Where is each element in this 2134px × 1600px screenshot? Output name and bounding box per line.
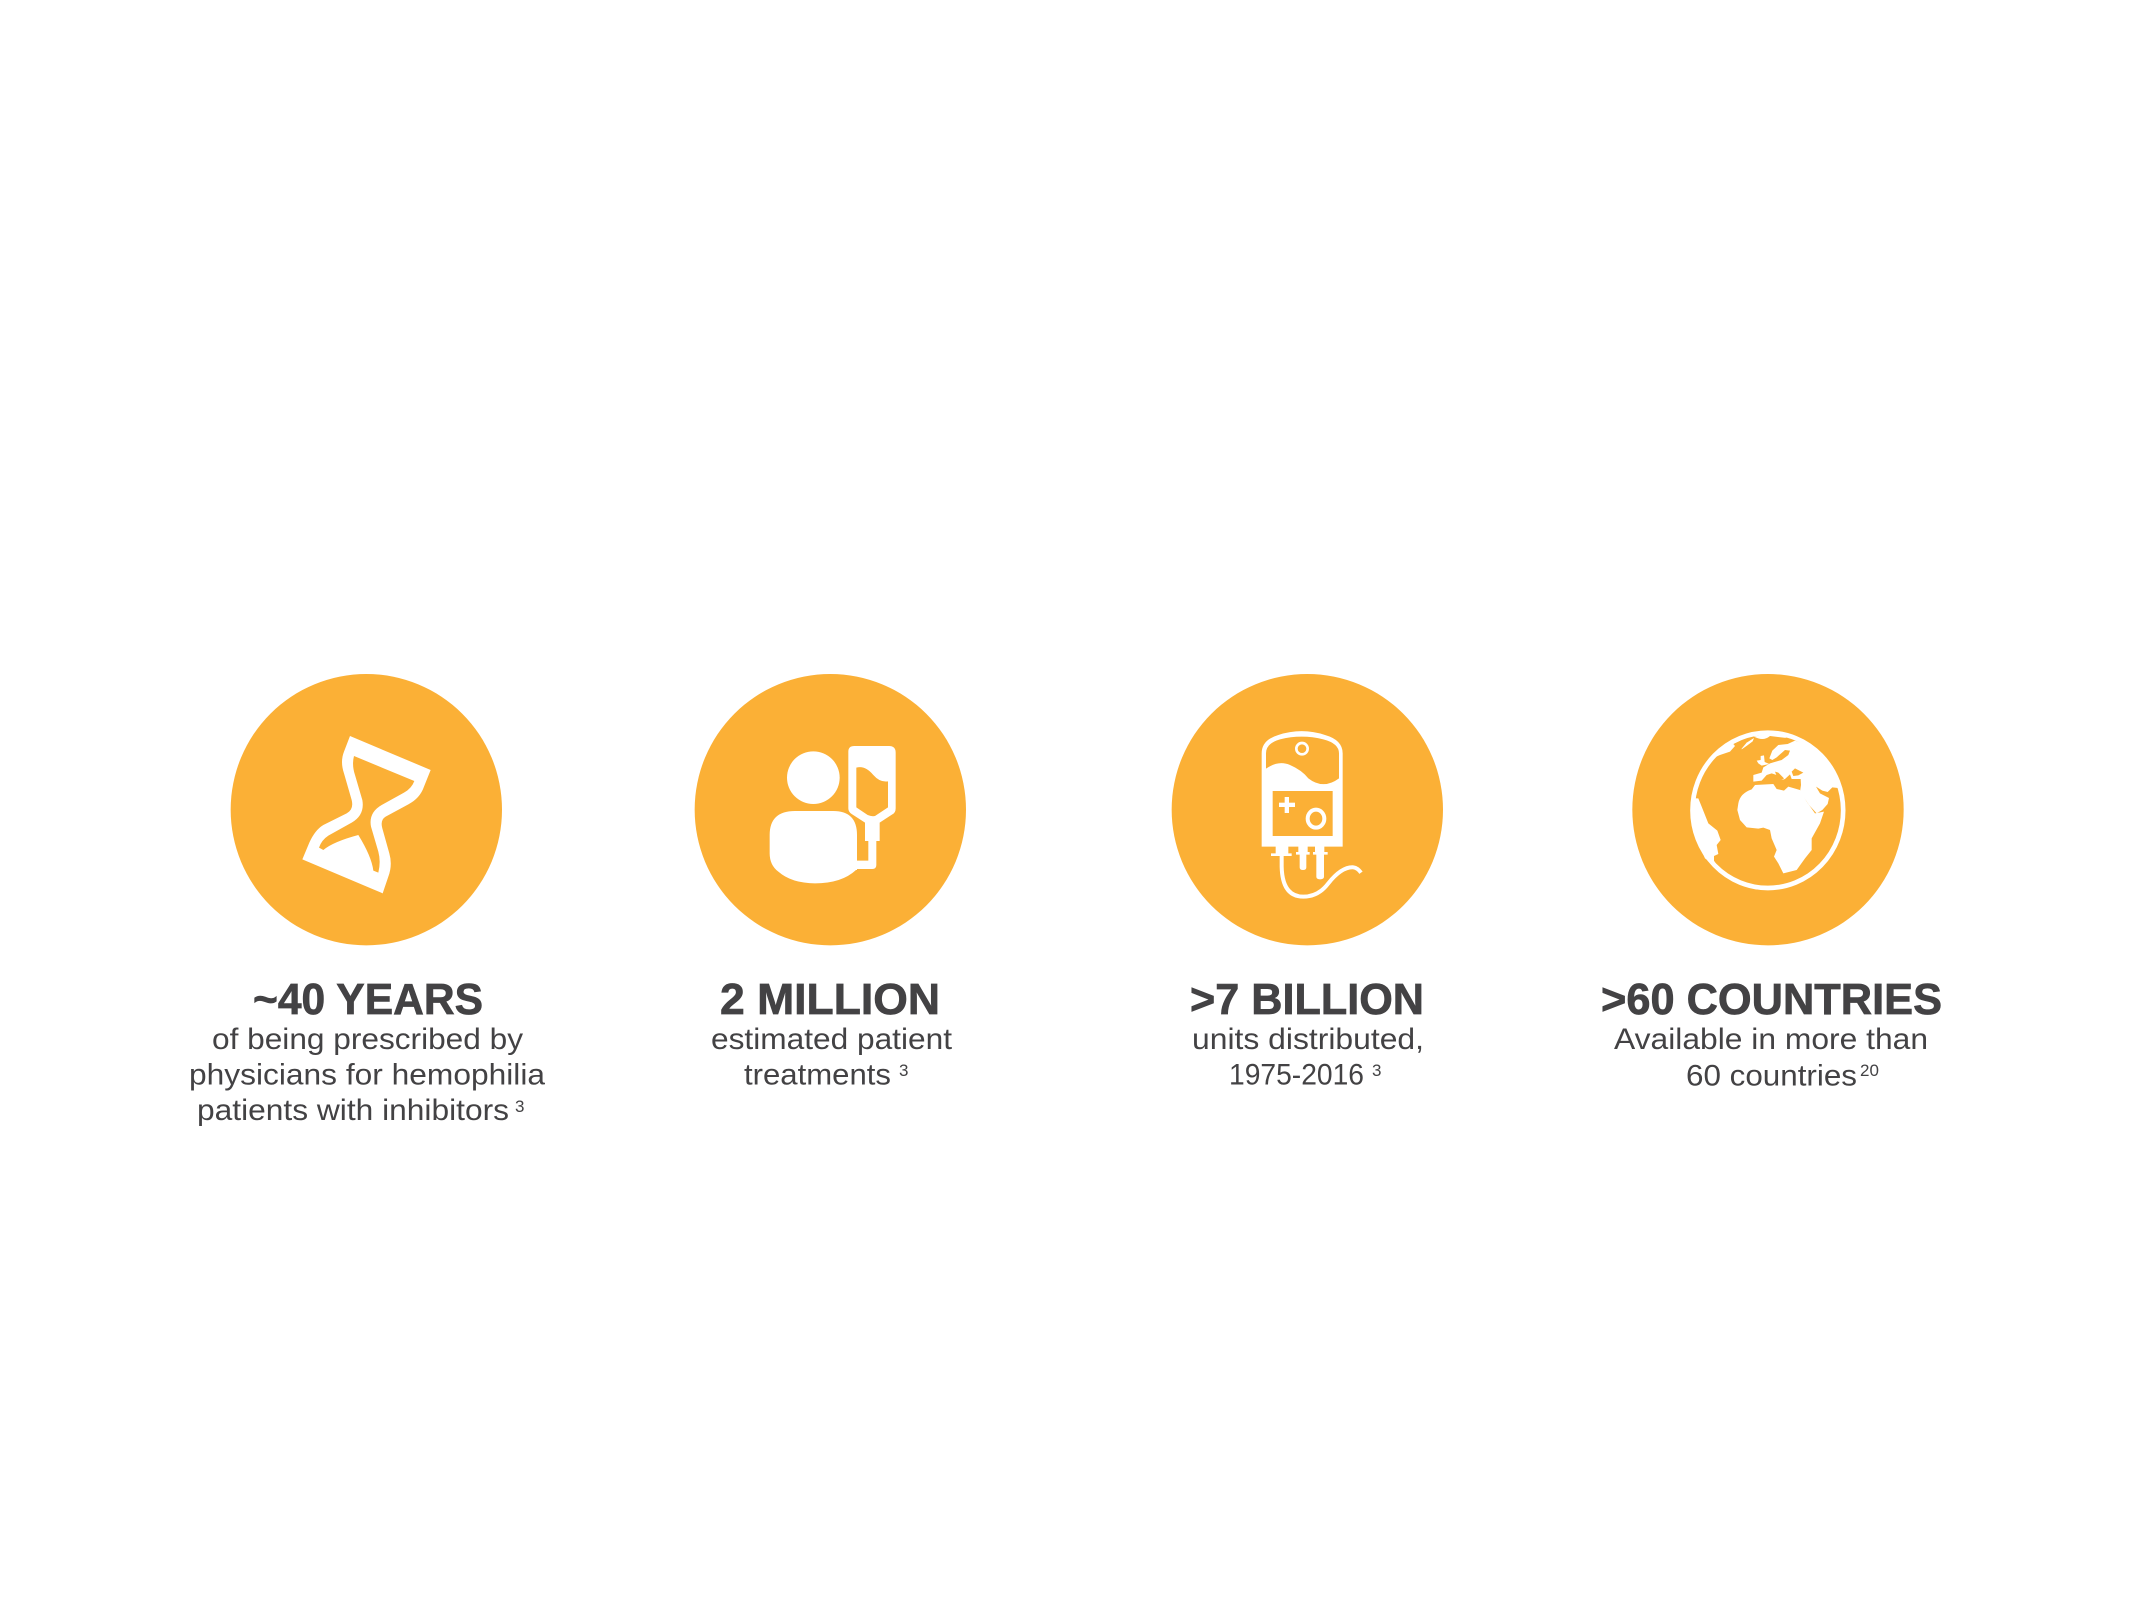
- text: description: [711, 1023, 953, 1092]
- text: description: treatments: [744, 1058, 891, 1092]
- icon: hourglass in orange circle: [231, 674, 502, 945]
- text: description: 3: [899, 1061, 908, 1080]
- text: description: 3: [515, 1097, 524, 1116]
- heading: 2 MILLION: 2 MILLION: [720, 975, 940, 1024]
- panel: 60 countries: [1601, 674, 1942, 1092]
- text: description: [1614, 1023, 1928, 1092]
- panel: 2 million: [695, 674, 966, 1092]
- South America: [1691, 798, 1721, 868]
- icon: patient with infusion bag in orange circle: [695, 674, 966, 945]
- text: description: patients with inhibitors: [197, 1094, 509, 1127]
- North America and Greenland: [1712, 735, 1755, 759]
- Eurasia: [1753, 741, 1841, 813]
- icon: globe in orange circle: [1632, 674, 1904, 945]
- heading: >7 BILLION: >7 BILLION: [1190, 975, 1424, 1024]
- heading: ~40 YEARS: ~40 YEARS: [253, 975, 483, 1024]
- panel: 40 years: [189, 674, 545, 1127]
- text: description: 1975-2016: [1229, 1058, 1364, 1092]
- heading: >60 COUNTRIES: >60 COUNTRIES: [1601, 975, 1942, 1024]
- text: description: estimated patient: [711, 1023, 953, 1056]
- UK and Ireland: [1757, 755, 1769, 766]
- panel: 7 billion: [1172, 674, 1443, 1092]
- text: description: Available in more than: [1614, 1023, 1928, 1056]
- text: description: physicians for hemophilia: [189, 1058, 545, 1092]
- text: description: [189, 1023, 545, 1127]
- text: description: 3: [1372, 1061, 1381, 1080]
- icon: blood bag in orange circle: [1172, 674, 1443, 945]
- text: description: [1192, 1023, 1424, 1092]
- text: description: units distributed,: [1192, 1023, 1424, 1056]
- text: description: of being prescribed by: [212, 1023, 523, 1056]
- text: description: 60 countries: [1686, 1060, 1857, 1092]
- Africa: [1737, 784, 1824, 873]
- text: description: 20: [1860, 1061, 1879, 1080]
